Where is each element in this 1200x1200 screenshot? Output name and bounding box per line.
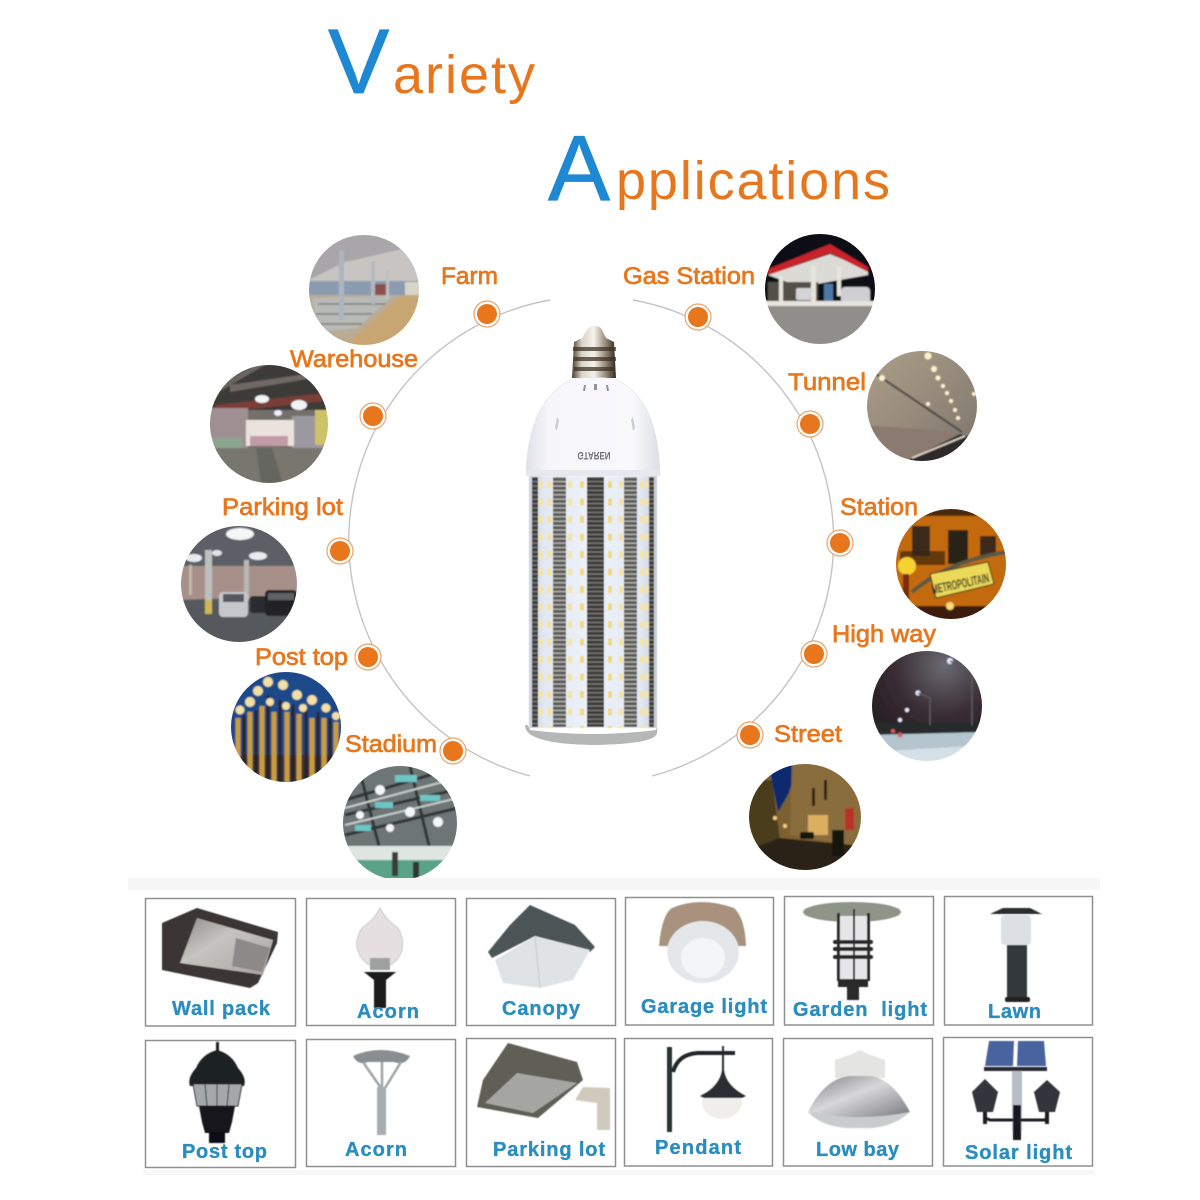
photo: gas station	[765, 234, 875, 344]
corn LED bulb	[525, 326, 660, 745]
card: Garden light: Garden light	[793, 999, 927, 1021]
panel: light fixture types	[128, 878, 1100, 1175]
marker: Tunnel	[797, 411, 823, 437]
photo: highway	[872, 651, 982, 761]
card: Post top	[146, 1040, 296, 1168]
label: Warehouse: Warehouse	[290, 346, 418, 373]
photo: farm	[309, 235, 419, 345]
marker: Station	[827, 530, 853, 556]
card: Parking lot: Parking lot	[493, 1139, 605, 1161]
card: Acorn pole	[306, 1040, 456, 1166]
marker: Warehouse	[360, 403, 386, 429]
card: Garden light	[784, 896, 934, 1025]
card: Wall pack: Wall pack	[172, 998, 271, 1020]
label: Farm: Farm	[441, 263, 498, 290]
card: Solar light: Solar light	[965, 1142, 1072, 1164]
card: Garage light: Garage light	[641, 996, 767, 1018]
card: Acorn globe: Acorn	[357, 1001, 419, 1023]
label: Street: Street	[774, 721, 842, 748]
label: Station: Station	[840, 494, 918, 521]
card: Lawn: Lawn	[988, 1001, 1041, 1023]
title: Variety: ariety	[393, 45, 535, 105]
timeline ring arcs	[349, 300, 834, 776]
photo: parking lot	[181, 526, 297, 642]
title: Applications: A	[548, 116, 610, 220]
card: Wall pack	[146, 898, 296, 1026]
title: Variety	[328, 11, 535, 113]
card: Low bay	[784, 1038, 932, 1166]
marker: Gas Station	[685, 304, 711, 330]
card: Solar light	[944, 1038, 1092, 1166]
bulb LED body	[529, 476, 657, 728]
title: Applications: pplications	[616, 151, 890, 211]
card: Pendant	[624, 1038, 772, 1166]
photo: station: METROPOLITAIN	[931, 570, 990, 597]
label: Stadium: Stadium	[345, 731, 437, 758]
card: Garage light	[626, 898, 774, 1025]
photo: warehouse	[210, 365, 328, 483]
label: Gas Station: Gas Station	[623, 263, 755, 290]
marker: Parking lot	[327, 538, 353, 564]
photo: post top lamps	[231, 672, 341, 782]
marker: High way	[801, 641, 827, 667]
marker: Stadium	[440, 738, 466, 764]
card: Acorn pole: Acorn	[345, 1139, 407, 1161]
bulb screw base	[572, 326, 616, 378]
photo: street	[749, 764, 861, 870]
card: Pendant: Pendant	[655, 1137, 741, 1159]
bulb white dome: GTAREN	[578, 449, 611, 461]
marker: Post top	[355, 644, 381, 670]
card: Low bay: Low bay	[816, 1139, 900, 1161]
photo: tunnel	[867, 351, 977, 461]
label: Tunnel: Tunnel	[788, 369, 866, 396]
card: Canopy	[466, 898, 616, 1026]
label: Post top: Post top	[255, 644, 348, 671]
card: Acorn globe	[306, 898, 456, 1026]
label: Parking lot: Parking lot	[222, 494, 343, 521]
marker: Farm	[474, 301, 500, 327]
card: Lawn	[944, 896, 1092, 1025]
title: Applications	[548, 116, 890, 220]
title: Variety: V	[328, 11, 389, 113]
marker: Street	[737, 722, 763, 748]
photo: stadium	[343, 766, 457, 878]
card: Canopy: Canopy	[502, 998, 581, 1020]
card: Post top: Post top	[182, 1141, 267, 1163]
bulb bottom cap	[525, 725, 657, 745]
label: High way: High way	[832, 621, 936, 648]
photo: station	[896, 509, 1006, 619]
bulb white dome	[526, 378, 660, 476]
card: Parking lot	[466, 1038, 616, 1166]
